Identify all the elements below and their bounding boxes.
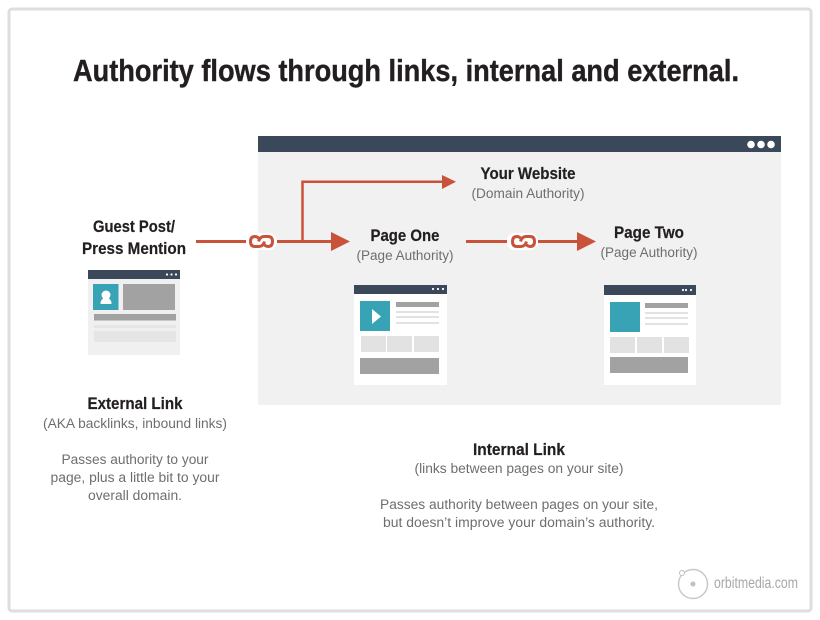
heading: guest post [82,218,186,258]
heading: page two: (Page Authority) [600,245,698,260]
text block: external link: Passes authority to your [62,452,209,467]
icon: page two thumbnail [604,285,696,385]
heading: page two [600,224,698,260]
logo: orbit media [678,570,798,598]
text block: external link: External Link [88,395,183,413]
icon: chain link external [246,233,277,250]
panel: your website browser window [258,136,781,405]
text block: external link: page, plus a little bit to your [50,470,220,485]
text block: external link: (AKA backlinks, inbound links) [43,416,227,431]
heading: your website [472,165,584,201]
heading: your website: Your Website [480,165,576,183]
text block: external link [43,395,227,503]
text block: internal link: Internal Link [473,441,566,459]
heading: page one: Page One [370,227,440,245]
icon: chain link internal [507,233,538,250]
heading: page two: Page Two [614,224,684,242]
text block: internal link: Passes authority between pages on your site, [380,497,658,512]
arrow: external link into page one [196,232,350,251]
arrow: page one to page two [466,232,596,251]
icon: page one thumbnail [354,285,447,385]
title: Authority flows through links, internal and external. [73,53,739,88]
icon: guest post page thumbnail [88,270,180,355]
arrow: up to your website [302,175,456,241]
text block: internal link: but doesn’t improve your domain’s authority. [383,515,655,530]
text block: external link: overall domain. [88,488,182,503]
text block: internal link: (links between pages on your site) [414,461,624,476]
heading: page one: (Page Authority) [356,248,454,263]
heading: your website: (Domain Authority) [472,186,584,201]
heading: guest post: Press Mention [82,240,186,258]
heading: page one [356,227,454,263]
text block: internal link [380,441,658,530]
heading: guest post: Guest Post/ [93,218,175,236]
